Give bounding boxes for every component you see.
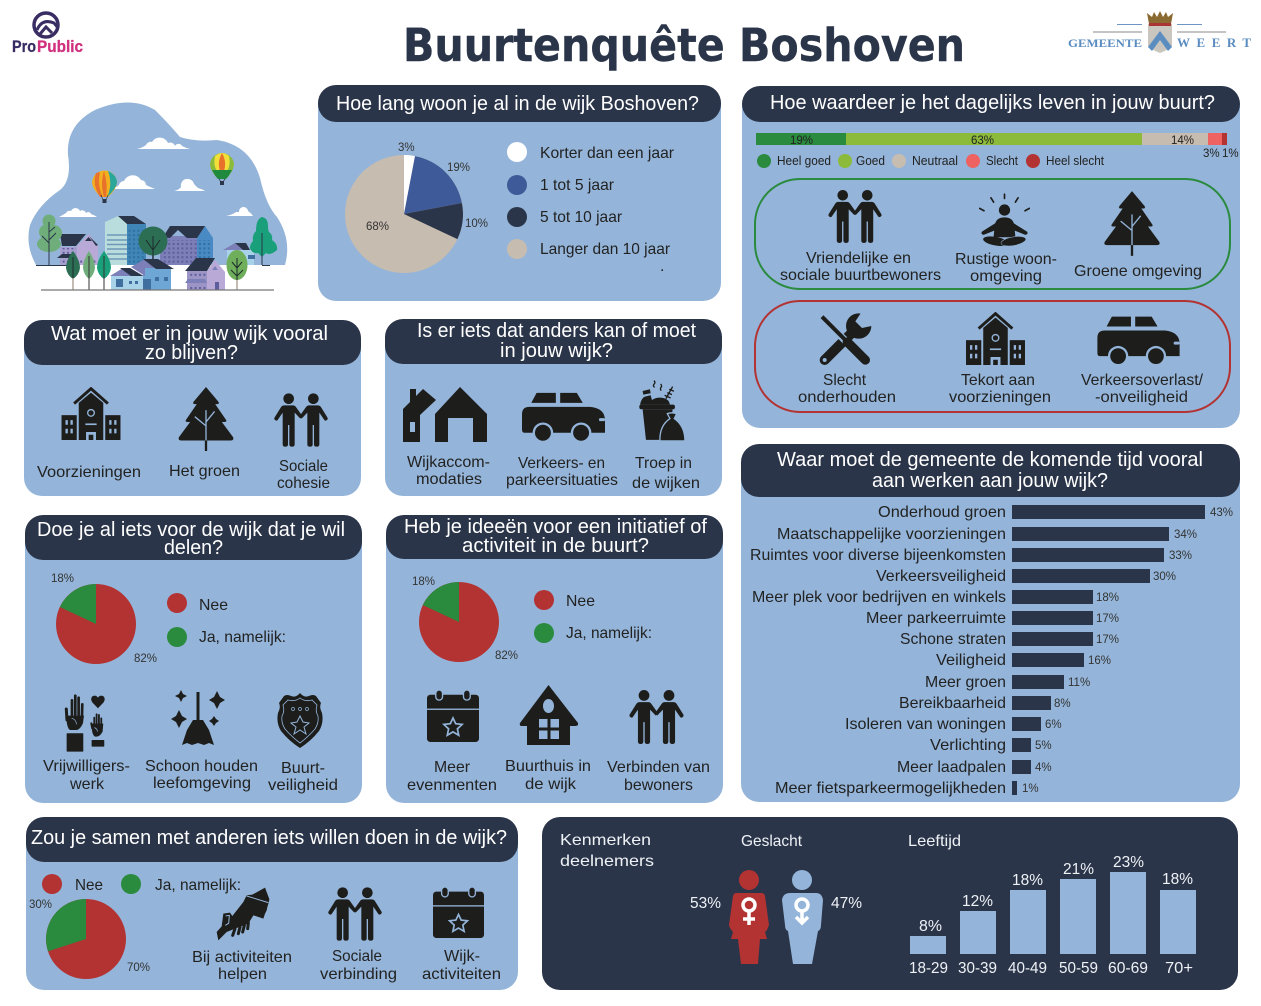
heading: geslacht: Geslacht — [741, 833, 803, 850]
label: sociale cohesie: cohesie — [277, 475, 330, 492]
legend: Ja, namelijk: — [199, 629, 286, 646]
icon: afval — [639, 381, 685, 441]
illustration: neighbourhood — [28, 102, 287, 290]
bar chart: leeftijd: 40-49 — [1008, 960, 1047, 977]
bar chart: leeftijd: 12% — [962, 893, 993, 910]
bar chart: prioriteiten: Veiligheid — [936, 652, 1006, 669]
bar chart: prioriteiten: 16% — [1088, 655, 1111, 667]
bar chart: prioriteiten: 34% — [1174, 529, 1197, 541]
label: verkeersoverlast: Verkeersoverlast/ — [1081, 372, 1204, 389]
heading — [741, 444, 1240, 497]
logo: ProPublic: Pro — [12, 37, 36, 56]
stacked bar: waardering: 1% — [1222, 148, 1239, 160]
icon: bezem — [171, 690, 225, 745]
bar chart: prioriteiten: Meer parkeerruimte — [866, 610, 1006, 627]
panel background — [741, 446, 1240, 802]
label: slecht onderhouden: onderhouden — [798, 389, 896, 406]
label: verbinden van bewoners — [607, 759, 710, 794]
label: bij activiteiten helpen: helpen — [218, 966, 267, 983]
bar chart: prioriteiten: 30% — [1153, 571, 1176, 583]
label: buurthuis: Buurthuis in — [505, 758, 591, 775]
pie chart: woonduur: 19% — [447, 162, 470, 174]
bar chart: leeftijd: 8% — [919, 918, 942, 935]
label: tekort aan voorzieningen: voorzieningen — [949, 389, 1051, 406]
bar chart: leeftijd: 18% — [1162, 871, 1193, 888]
label: bij activiteiten helpen — [192, 949, 292, 983]
panel: kenmerken deelnemers — [542, 817, 1238, 990]
label: wijkaccommodaties: Wijkaccom- — [407, 454, 490, 471]
label: tekort aan voorzieningen — [949, 372, 1051, 406]
heading — [560, 832, 654, 870]
legend: Ja, namelijk: — [155, 877, 241, 894]
heading: deelnemers — [560, 853, 654, 870]
label: sociale verbinding: Sociale — [332, 948, 382, 965]
legend: waardering — [757, 154, 1104, 168]
legend: Nee — [566, 593, 595, 610]
heading: Hoe waardeer je het dagelijks leven in jouw buurt? — [770, 92, 1215, 114]
legend: woonduur: . — [660, 258, 664, 275]
figure: man — [782, 870, 862, 964]
heading: zo blijven? — [145, 342, 238, 364]
logo: ProPublic: Public — [37, 37, 83, 56]
icon: politieschild — [277, 693, 323, 748]
legend — [534, 590, 652, 643]
label: buurthuis: de wijk — [525, 776, 577, 793]
pie chart: woonduur: 68% — [366, 221, 389, 233]
icon: auto — [522, 393, 605, 441]
label: sociale verbinding — [320, 948, 397, 983]
heading: Wat moet er in jouw wijk vooral — [51, 323, 328, 345]
label: rustige woonomgeving — [955, 251, 1057, 285]
bar chart: prioriteiten: 43% — [1210, 507, 1233, 519]
figure: vrouw: 53% — [690, 895, 721, 912]
pie chart — [29, 899, 150, 979]
heading: Kenmerken — [560, 832, 651, 849]
heading — [26, 817, 518, 862]
bar chart: leeftijd: 18% — [1012, 872, 1043, 889]
heading — [24, 320, 361, 365]
figure: man: 47% — [831, 895, 862, 912]
legend — [167, 593, 286, 647]
bar chart: leeftijd: 30-39 — [958, 960, 997, 977]
label: buurtveiligheid — [268, 760, 338, 794]
label: wijkaccommodaties — [407, 454, 490, 488]
label: tekort aan voorzieningen: Tekort aan — [961, 372, 1035, 389]
legend: Nee — [75, 877, 103, 894]
label: sociale cohesie — [277, 458, 330, 492]
label: sociale verbinding: verbinding — [320, 966, 397, 983]
panel: waardering dagelijks leven — [742, 86, 1240, 428]
label: verkeersoverlast: -onveiligheid — [1095, 389, 1188, 406]
heading: Doe je al iets voor de wijk dat je wil — [37, 519, 345, 541]
label: verbinden van bewoners: Verbinden van — [607, 759, 710, 776]
panel: wat kan anders — [385, 319, 722, 496]
label: troep in de wijken: Troep in — [635, 455, 692, 472]
heading: activiteit in de buurt? — [462, 535, 649, 557]
panel: hoe lang woon je — [318, 85, 721, 301]
bar chart: prioriteiten: Bereikbaarheid — [899, 695, 1006, 712]
bar chart: leeftijd: 21% — [1063, 861, 1094, 878]
heading — [386, 515, 723, 559]
heading: Hoe lang woon je al in de wijk Boshoven? — [336, 93, 699, 115]
bar chart: prioriteiten: Meer plek voor bedrijven en winkels — [752, 589, 1006, 606]
panel: ideeen initiatief — [386, 515, 723, 803]
legend — [42, 874, 241, 894]
bar chart: leeftijd: 60-69 — [1108, 960, 1148, 977]
label: troep in de wijken: de wijken — [632, 475, 700, 492]
box: positief — [755, 179, 1230, 289]
bar chart: prioriteiten: 1% — [1022, 783, 1039, 795]
icon: buurthuis — [520, 685, 578, 745]
label: vriendelijke buurtbewoners: sociale buurtbewoners — [780, 267, 941, 284]
bar chart: prioriteiten: Onderhoud groen — [878, 504, 1006, 521]
logo: ProPublic — [12, 13, 83, 56]
label: vrijwilligerswerk: werk — [69, 776, 105, 793]
label: rustige woonomgeving: Rustige woon- — [955, 251, 1057, 268]
bar chart: prioriteiten: Verlichting — [930, 737, 1006, 754]
bar chart: prioriteiten: Isoleren van woningen — [845, 716, 1006, 733]
label: verkeerssituaties: Verkeers- en — [518, 455, 605, 472]
bar chart: prioriteiten: Meer groen — [925, 674, 1006, 691]
bar chart: prioriteiten: Meer laadpalen — [897, 759, 1006, 776]
panel: doe je al iets — [25, 515, 362, 803]
pie chart: 30% — [29, 899, 52, 911]
heading: Zou je samen met anderen iets willen doen in de wijk? — [31, 827, 507, 849]
pie chart: 82% — [134, 653, 157, 665]
bar chart: leeftijd: 50-59 — [1059, 960, 1098, 977]
heading: Is er iets dat anders kan of moet — [417, 320, 696, 342]
panel background — [318, 86, 721, 301]
panel background — [742, 88, 1240, 428]
logo: Gemeente Weert: GEMEENTE — [1068, 36, 1142, 50]
icon: mensen — [328, 887, 382, 941]
label: bij activiteiten helpen: Bij activiteiten — [192, 949, 292, 966]
label: slecht onderhouden: Slecht — [823, 372, 867, 389]
pie chart: woonduur — [345, 142, 488, 273]
legend: Ja, namelijk: — [566, 625, 652, 642]
legend: waardering: Goed — [856, 154, 885, 168]
logo: Gemeente Weert — [1068, 11, 1251, 53]
icon: twee mensen — [828, 190, 882, 243]
bar chart: prioriteiten: Schone straten — [900, 631, 1006, 648]
legend: woonduur: Korter dan een jaar — [540, 145, 675, 162]
label: sociale cohesie: Sociale — [279, 458, 328, 475]
label: vrijwilligerswerk — [43, 758, 130, 793]
pie chart: woonduur: 10% — [465, 218, 488, 230]
label: troep in de wijken — [632, 455, 700, 492]
panel background — [26, 819, 518, 990]
bar chart: prioriteiten: 33% — [1169, 550, 1192, 562]
bar chart: leeftijd: 70+ — [1165, 960, 1193, 977]
label: wijkactiviteiten: activiteiten — [422, 966, 501, 983]
bar chart: prioriteiten: 18% — [1096, 592, 1119, 604]
title: Buurtenquête Boshoven — [403, 19, 965, 72]
label: verbinden van bewoners: bewoners — [624, 777, 693, 794]
box: negatief — [755, 301, 1230, 412]
bar chart: leeftijd: 23% — [1113, 854, 1144, 871]
legend: woonduur: 1 tot 5 jaar — [540, 177, 615, 194]
heading — [742, 86, 1240, 122]
bar chart: prioriteiten: 6% — [1045, 719, 1062, 731]
label: voorzieningen: Voorzieningen — [37, 464, 141, 481]
stacked bar: waardering — [756, 133, 1239, 160]
label: verkeerssituaties — [506, 455, 618, 489]
bar chart: leeftijd — [909, 854, 1196, 977]
panel: wat moet blijven — [24, 320, 361, 496]
stacked bar: waardering: 19% — [790, 135, 813, 147]
label: groene omgeving: Groene omgeving — [1074, 263, 1202, 280]
pie chart — [412, 576, 518, 662]
bar chart: prioriteiten: Ruimtes voor diverse bijeenkomsten — [750, 547, 1006, 564]
icon: gereedschap — [822, 311, 875, 362]
legend: waardering: Heel slecht — [1046, 154, 1104, 168]
bar chart: prioriteiten: Verkeersveiligheid — [876, 568, 1006, 585]
bar chart: prioriteiten: 4% — [1035, 762, 1052, 774]
icon: voorzieningen — [62, 389, 120, 440]
legend: waardering: Slecht — [986, 154, 1018, 168]
bar chart: prioriteiten: Meer fietsparkeermogelijkheden — [775, 780, 1006, 797]
label: verkeersoverlast — [1081, 372, 1204, 406]
label: wijkactiviteiten — [422, 948, 501, 983]
panel background — [542, 817, 1238, 990]
label: slecht onderhouden — [798, 372, 896, 406]
stacked bar: waardering: 63% — [971, 135, 994, 147]
heading — [25, 515, 362, 560]
heading: leeftijd: Leeftijd — [908, 833, 961, 850]
pie chart — [51, 573, 157, 665]
icon: boom — [1104, 191, 1160, 256]
label: meer evenementen — [407, 759, 497, 794]
legend: Nee — [199, 597, 228, 614]
legend: waardering: Neutraal — [912, 154, 958, 168]
heading: delen? — [164, 537, 223, 559]
heading — [318, 85, 721, 122]
panel: gemeente aan werken — [741, 444, 1240, 802]
pie chart: 18% — [412, 576, 435, 588]
icon: gebouw — [966, 314, 1025, 365]
stacked bar: waardering: 14% — [1171, 135, 1194, 147]
label: meer evenementen: Meer — [434, 759, 471, 776]
bar chart: leeftijd: 18-29 — [909, 960, 948, 977]
label: buurtveiligheid: Buurt- — [281, 760, 325, 777]
icon: auto — [1097, 317, 1180, 364]
bar chart: prioriteiten: Maatschappelijke voorzieningen — [777, 526, 1006, 543]
panel background — [385, 321, 722, 496]
label: vrijwilligerswerk: Vrijwilligers- — [43, 758, 130, 775]
icon: handdruk — [217, 888, 269, 940]
logo: Gemeente Weert: WEERT — [1177, 35, 1251, 50]
icon: bewoners — [629, 690, 684, 744]
bar chart: prioriteiten: 17% — [1096, 634, 1119, 646]
label: schoon houden: leefomgeving — [153, 775, 251, 792]
icon: mediteren — [980, 194, 1029, 248]
icon: kalender — [427, 690, 479, 742]
bar chart: prioriteiten: 11% — [1068, 677, 1090, 689]
label: buurtveiligheid: veiligheid — [268, 777, 338, 794]
icon: sociale cohesie — [274, 393, 328, 447]
legend: waardering: Heel goed — [777, 154, 831, 168]
icon: kalender — [433, 887, 484, 938]
heading: Waar moet de gemeente de komende tijd vooral — [777, 449, 1203, 471]
panel background — [25, 517, 362, 803]
label: vriendelijke buurtbewoners — [780, 250, 941, 284]
legend: woonduur: Langer dan 10 jaar — [540, 241, 671, 258]
label: schoon houden — [145, 758, 258, 792]
panel background — [24, 322, 361, 496]
legend: woonduur: 5 tot 10 jaar — [540, 209, 623, 226]
icon: woningen — [403, 387, 487, 442]
label: schoon houden: Schoon houden — [145, 758, 258, 775]
bar chart: prioriteiten: 17% — [1096, 613, 1119, 625]
bar chart: prioriteiten — [750, 504, 1233, 797]
pie chart: 82% — [495, 650, 518, 662]
heading: aan werken aan jouw wijk? — [872, 470, 1108, 492]
label: wijkactiviteiten: Wijk- — [444, 948, 480, 965]
label: buurthuis — [505, 758, 591, 793]
panel: samen met anderen — [26, 817, 518, 990]
icon: het groen — [179, 387, 233, 451]
bar chart: prioriteiten: 5% — [1035, 740, 1052, 752]
label: rustige woonomgeving: omgeving — [970, 268, 1042, 285]
pie chart: 70% — [127, 962, 150, 974]
heading: Heb je ideeën voor een initiatief of — [404, 516, 707, 538]
pie chart: woonduur: 3% — [398, 142, 415, 154]
pie chart: 18% — [51, 573, 74, 585]
heading: in jouw wijk? — [500, 340, 613, 362]
legend: woonduur — [507, 142, 675, 275]
label: meer evenementen: evenmenten — [407, 777, 497, 794]
stacked bar: waardering: 3% — [1203, 148, 1220, 160]
label: wijkaccommodaties: modaties — [416, 471, 482, 488]
figure: vrouw — [690, 870, 769, 964]
icon: handen — [66, 696, 105, 752]
heading — [385, 319, 722, 364]
label: het groen: Het groen — [169, 463, 240, 480]
label: vriendelijke buurtbewoners: Vriendelijke en — [806, 250, 911, 267]
label: verkeerssituaties: parkeersituaties — [506, 472, 618, 489]
panel background — [386, 517, 723, 803]
bar chart: prioriteiten: 8% — [1054, 698, 1071, 710]
